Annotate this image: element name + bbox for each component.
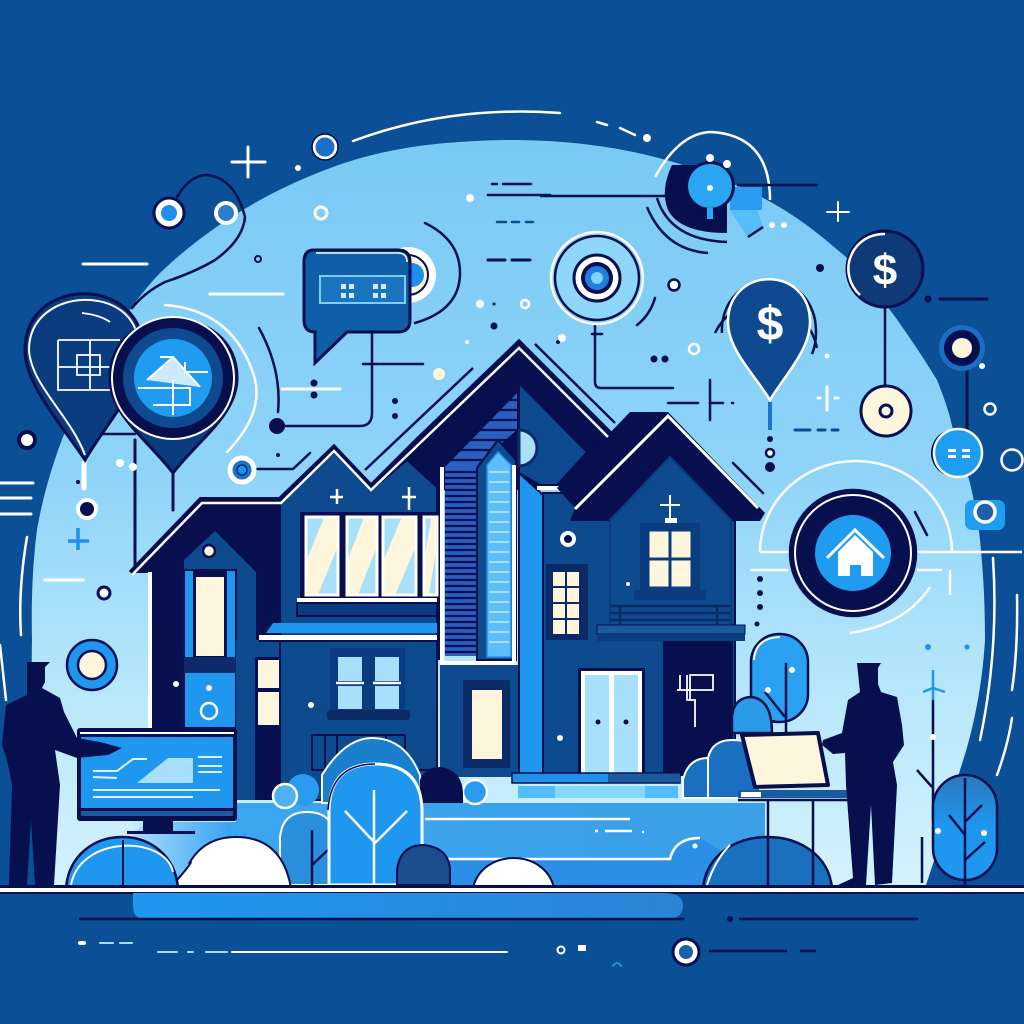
icon: camera badge	[965, 500, 1005, 530]
icon: dollar pin: $	[757, 298, 784, 351]
windows: upper row	[306, 517, 437, 595]
white rules and plus marks	[0, 147, 849, 580]
white sweep arcs	[0, 112, 1017, 775]
icon: monitor	[77, 728, 237, 834]
roof lines	[131, 343, 615, 575]
icon: target ring	[551, 232, 643, 324]
houses	[131, 343, 765, 800]
icon: linked nodes	[154, 198, 236, 228]
ground band	[0, 885, 1024, 894]
scattered dots	[76, 264, 932, 626]
icon: ring top	[312, 134, 338, 160]
icon: dollar pin	[715, 279, 826, 457]
bushes on ground	[66, 837, 832, 888]
house: tower roof	[371, 345, 612, 660]
house: tower	[440, 383, 587, 777]
small nodes left	[19, 432, 254, 599]
right trees and bushes	[683, 634, 808, 798]
house: right block	[537, 412, 765, 775]
icon: bottom ring	[673, 939, 699, 965]
windows: lower row	[327, 648, 410, 720]
pool bar	[133, 893, 683, 919]
silhouette: presenter	[2, 662, 122, 885]
icon: dollar badge	[847, 231, 923, 307]
icon: right tree	[933, 775, 997, 888]
icon: post with arrow	[917, 644, 970, 883]
icon: chat bubble	[304, 247, 436, 363]
icon: big tree	[280, 764, 450, 885]
icon: plan pin	[25, 294, 143, 460]
icon: home badge	[750, 461, 1022, 633]
ring left	[67, 640, 117, 690]
icon: top right dial	[540, 132, 818, 253]
icon: navy ring top right	[939, 325, 985, 371]
navy connector lines	[100, 175, 987, 570]
icon: laptop on desk	[738, 733, 848, 885]
white dots and rings	[116, 134, 1022, 471]
icon: dollar badge: $	[873, 246, 897, 295]
silhouette: client	[822, 663, 904, 885]
icon: cream ring	[861, 386, 911, 436]
house: left wing	[132, 502, 298, 800]
bottom details	[80, 916, 917, 966]
lawn	[133, 803, 765, 888]
shrubs behind lawn	[273, 738, 487, 808]
house: porch	[512, 773, 680, 798]
icon: blue button	[931, 429, 982, 477]
sky dome	[32, 140, 985, 888]
icon: house pin	[110, 317, 237, 473]
house: middle block	[259, 452, 437, 800]
